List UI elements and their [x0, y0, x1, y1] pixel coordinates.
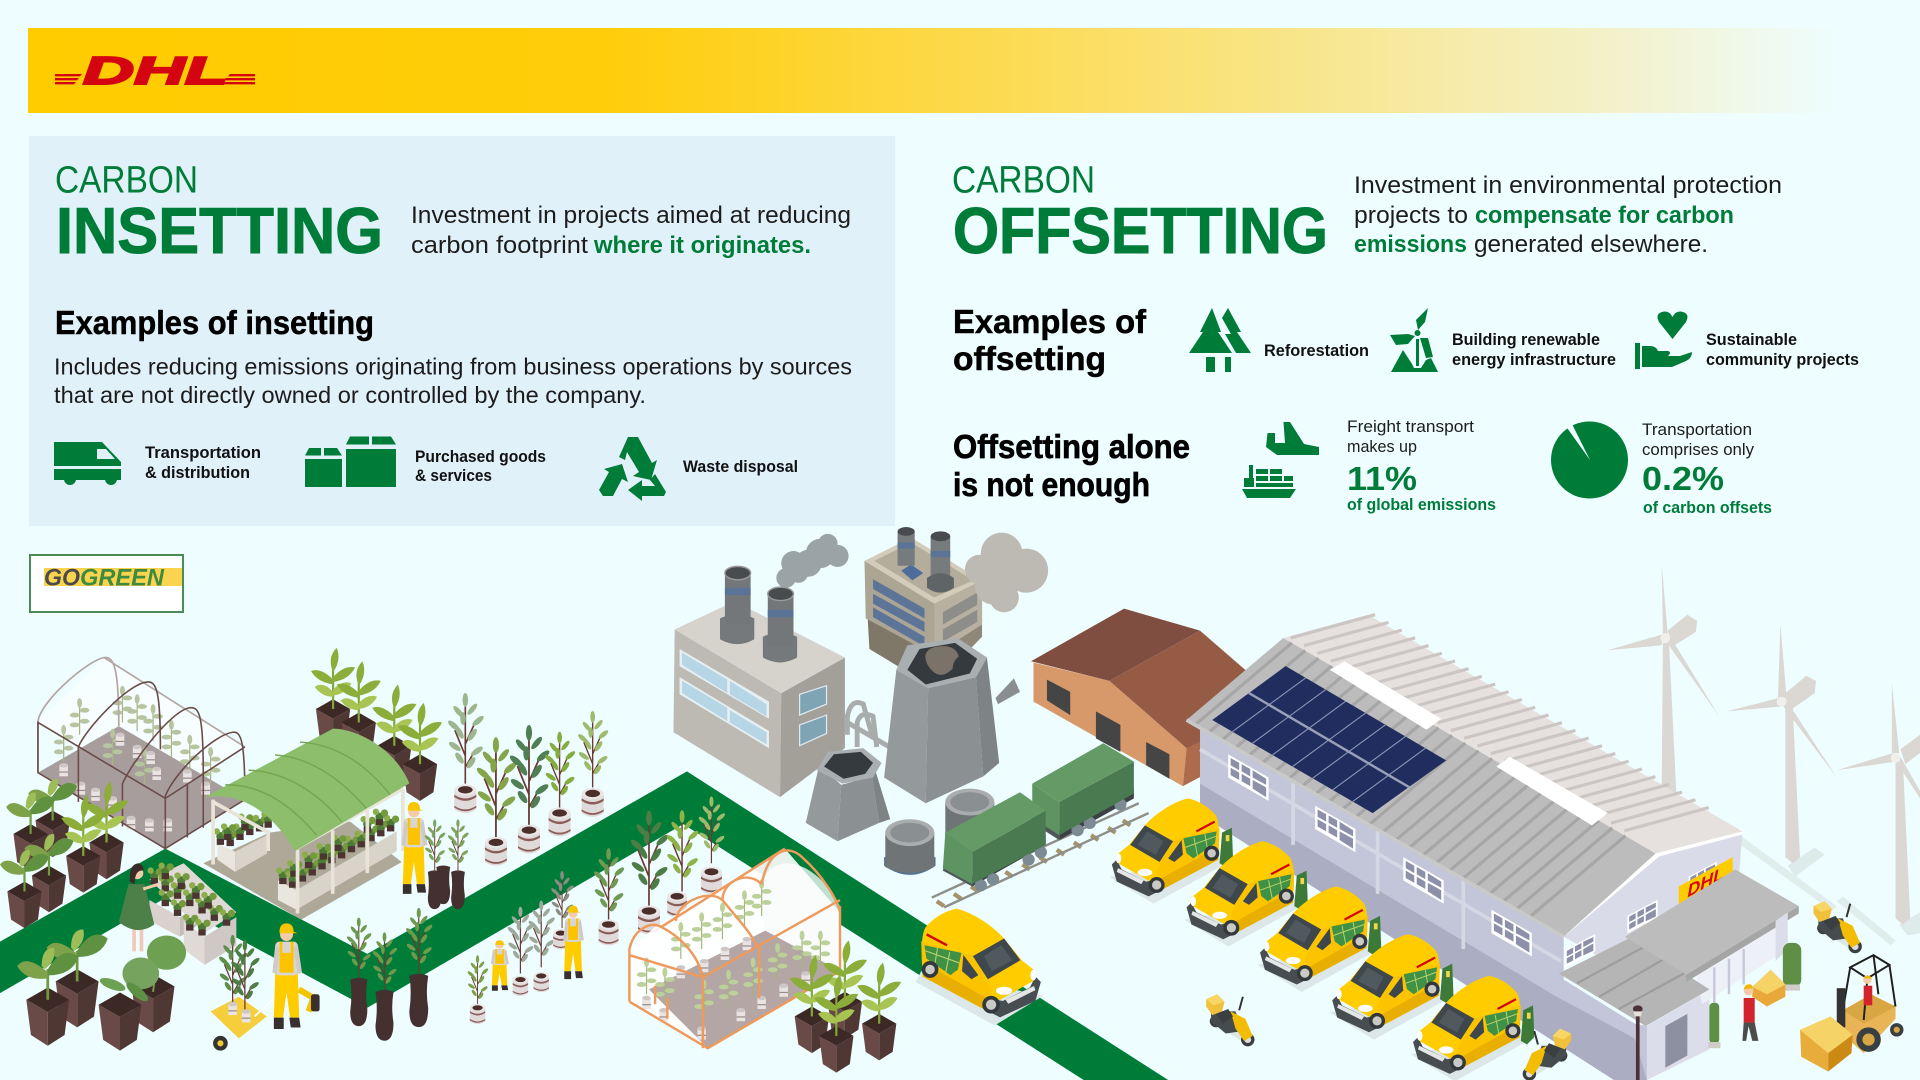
- turbine 1: [1608, 564, 1719, 798]
- title: carbon offsetting: CARBON: [952, 160, 1095, 202]
- label: renewable energy: energy infrastructure: [1452, 351, 1616, 369]
- gable and entrance: [1564, 831, 1778, 1004]
- heading: examples of offsetting: offsetting: [953, 340, 1106, 377]
- skylights: [1330, 661, 1608, 825]
- insetting examples text: that are not directly owned or controlled by the company.: [54, 382, 646, 408]
- solar panels: [1212, 666, 1446, 813]
- potted plants: lower left: [17, 929, 186, 1051]
- label: renewable energy: [1452, 331, 1616, 369]
- turbine 2: [1727, 624, 1837, 863]
- roof: grey slope: [1187, 638, 1656, 937]
- heading: offsetting alone is not enough: Offsetting alone: [953, 428, 1190, 465]
- stat: transportation 0.2%: [1642, 420, 1772, 517]
- trees in white pots: upper row: [447, 693, 609, 866]
- header banner: [28, 28, 1840, 113]
- road: [0, 771, 1168, 1080]
- stall benches: [214, 809, 399, 910]
- wind turbines: [1608, 564, 1920, 945]
- icon: recycling: [599, 437, 666, 501]
- label: purchased goods: & services: [415, 467, 492, 485]
- warehouse windows: [1228, 754, 1717, 985]
- label: waste disposal: Waste disposal: [683, 458, 798, 476]
- trees in white pots: apex group: [629, 796, 726, 934]
- insetting description: Investment in projects aimed at reducing: [411, 202, 851, 229]
- main warehouse: [1187, 615, 1799, 1080]
- title: carbon insetting: INSETTING: [56, 194, 383, 267]
- GoGreen badge: [30, 555, 183, 612]
- roof: light slope: [1283, 615, 1742, 853]
- factory: pipes: [847, 703, 900, 753]
- GoGreen badge: GO: [44, 564, 80, 592]
- potted plants: behind canopy: [311, 648, 442, 801]
- title: carbon insetting: CARBON: [55, 160, 198, 202]
- heading: offsetting alone is not enough: [953, 428, 1190, 503]
- rear chimneys: [898, 527, 954, 593]
- stat: transportation 0.2%: 0.2%: [1642, 460, 1724, 497]
- warehouse walls: [1200, 722, 1709, 1080]
- factory: main building: [673, 566, 845, 797]
- label: transportation: [145, 444, 261, 482]
- heading: examples of offsetting: [953, 303, 1147, 377]
- pie chart: 0.2% share: [1551, 422, 1628, 498]
- stat: transportation 0.2%: comprises only: [1642, 440, 1754, 459]
- label: transportation: Transportation: [145, 444, 261, 462]
- icon: ship: [1242, 465, 1296, 498]
- courier carrying box: [1742, 970, 1785, 1041]
- label: purchased goods: Purchased goods: [415, 448, 546, 466]
- storage cylinders: [884, 789, 994, 875]
- delivery vans at chargers: [1109, 798, 1534, 1080]
- trees in black bags: center: [346, 908, 433, 1041]
- insetting examples text: Includes reducing emissions originating from business operations by sources: [54, 354, 852, 380]
- stat: freight 11%: makes up: [1347, 437, 1417, 456]
- trees in black bags: near worker: [424, 819, 470, 909]
- woman figure: [119, 863, 159, 951]
- stat: transportation 0.2%: Transportation: [1642, 420, 1752, 439]
- icon: truck: [54, 442, 121, 485]
- turbine 3: [1837, 683, 1920, 924]
- cooling tower: small: [806, 748, 890, 841]
- stat: freight 11%: Freight transport: [1347, 417, 1474, 436]
- train on rails: [932, 743, 1149, 907]
- insetting description: carbon footprint: [411, 232, 588, 259]
- icon: plane: [1266, 422, 1319, 455]
- factory: rear beige building: [864, 527, 982, 688]
- offsetting description: Investment in environmental protection: [1354, 172, 1782, 199]
- panel: carbon insetting: [29, 136, 895, 526]
- worker with wheelbarrow: [211, 923, 320, 1051]
- greenhouse: orange frame: [629, 849, 840, 1048]
- small trees and kneeling workers: [467, 848, 625, 1024]
- insetting description: [411, 202, 851, 259]
- factory: second smoke: [965, 533, 1048, 612]
- title: carbon offsetting: OFFSETTING: [953, 194, 1328, 267]
- cooling tower: large: [884, 638, 1020, 803]
- icon: boxes: [305, 436, 396, 487]
- DHL sign: DHL: [1687, 862, 1724, 901]
- icon: heart in hand: [1635, 312, 1692, 369]
- heading: offsetting alone is not enough: is not enough: [953, 466, 1150, 503]
- label: transportation: & distribution: [145, 464, 250, 482]
- stat: transportation 0.2%: of carbon offsets: [1643, 499, 1772, 517]
- canopy stall: [203, 729, 409, 920]
- title: carbon offsetting: [952, 160, 1328, 267]
- woman at plant table: [119, 863, 236, 965]
- DHL logo: [55, 50, 255, 93]
- heading: examples of offsetting: Examples of: [953, 303, 1147, 340]
- offsetting description: projects to: [1354, 202, 1468, 229]
- icon: trees: [1189, 308, 1251, 372]
- label: renewable energy: Building renewable: [1452, 331, 1600, 349]
- delivery van on road: [916, 909, 1044, 1025]
- worker near stall: [402, 802, 427, 894]
- label: purchased goods: [415, 448, 546, 485]
- GoGreen badge: GREEN: [80, 564, 165, 592]
- greenhouse: brown frame: [38, 657, 245, 849]
- offsetting description: generated elsewhere.: [1474, 231, 1708, 258]
- offsetting description: compensate for carbon: [1475, 202, 1734, 229]
- insetting examples text: [54, 354, 852, 408]
- lamp post: [1633, 1005, 1643, 1080]
- offsetting description: [1354, 172, 1782, 258]
- label: community projects: [1706, 331, 1859, 369]
- DHL logo: DHL: [83, 50, 228, 93]
- main chimneys: [720, 566, 797, 662]
- stat: freight 11%: 11%: [1347, 460, 1417, 497]
- icon: wind turbine: [1390, 308, 1438, 372]
- hedges: [1708, 943, 1801, 1048]
- canopy roofs: [1559, 869, 1799, 1026]
- scooters: [1206, 901, 1862, 1080]
- stat: freight 11%: of global emissions: [1347, 496, 1496, 514]
- label: reforestation: Reforestation: [1264, 342, 1369, 360]
- DHL sign: [1679, 857, 1733, 905]
- stat: freight 11%: [1347, 417, 1496, 514]
- factory: smoke: [776, 534, 849, 588]
- forklift: [1800, 955, 1903, 1071]
- illustration: isometric scene: [0, 527, 1920, 1080]
- label: community projects: Sustainable: [1706, 331, 1797, 349]
- title: carbon insetting: [55, 160, 383, 267]
- offsetting description: emissions: [1354, 231, 1467, 258]
- heading: examples of insetting: Examples of insetting: [55, 304, 374, 341]
- brown warehouse: [1031, 609, 1247, 786]
- insetting description: where it originates.: [593, 232, 811, 259]
- rails: [932, 803, 1149, 907]
- potted plants: lower right of greenhouse: [790, 940, 901, 1073]
- panel: carbon offsetting: [952, 160, 1859, 517]
- label: community projects: community projects: [1706, 351, 1859, 369]
- potted plants: left cluster: [0, 779, 129, 928]
